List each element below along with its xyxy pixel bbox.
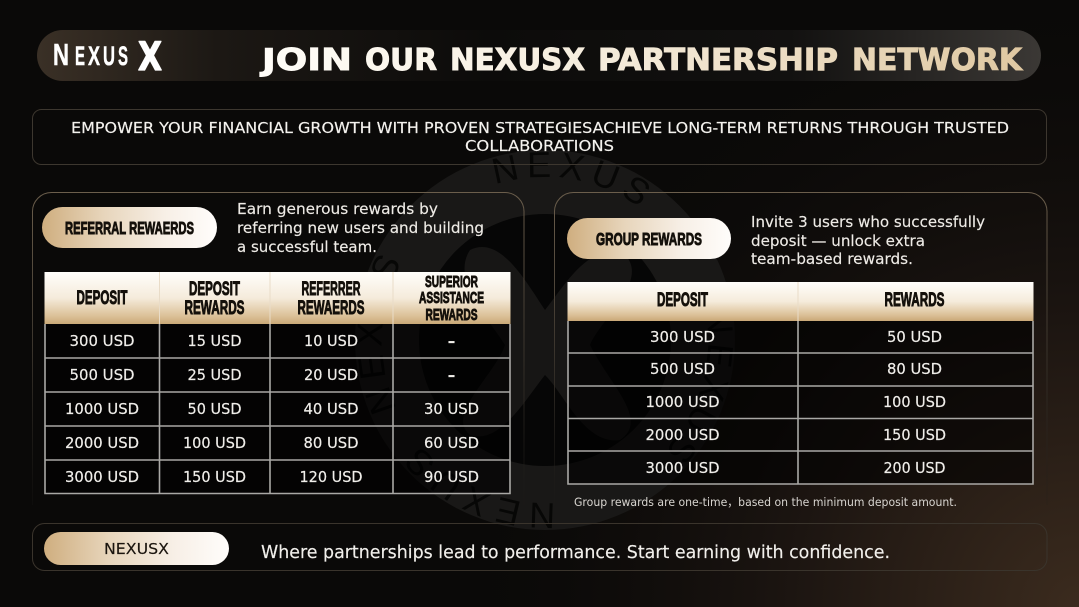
group description: deposit — unlock extra <box>751 232 925 250</box>
group description: team-based rewards. <box>751 250 913 268</box>
referral description: referring new users and building <box>237 219 484 237</box>
title: OUR <box>365 43 437 78</box>
table: referral rewards: REFERRER <box>302 279 361 300</box>
table: referral rewards: 10 USD <box>304 332 358 350</box>
table: referral rewards: DEPOSIT <box>189 279 240 300</box>
table: group rewards <box>568 282 1034 484</box>
title: NEXUSX <box>450 43 585 78</box>
logo: NexusX wordmark: X <box>88 41 100 71</box>
logo: NexusX wordmark: N <box>53 37 69 72</box>
table: referral rewards: 1000 USD <box>65 400 139 418</box>
logo: NexusX wordmark: E <box>75 41 85 71</box>
subheading box <box>32 110 1046 164</box>
referral description: a successful team. <box>237 238 377 256</box>
watermark: NexusX seal: NEXUS NEXUS NEXUS NEXUS <box>372 152 649 528</box>
tagline: Where partnerships lead to performance. Start earning with confidence. <box>261 542 890 563</box>
table: referral rewards <box>44 272 510 494</box>
table: referral rewards: REWARDS <box>184 298 244 319</box>
subheading box: EMPOWER YOUR FINANCIAL GROWTH WITH PROVEN STRATEGIESACHIEVE LONG-TERM RETURNS THROUGH TRUSTED <box>71 119 1009 137</box>
title <box>260 43 1024 78</box>
table: referral rewards: 90 USD <box>424 468 479 486</box>
table: group rewards: 80 USD <box>887 360 942 378</box>
table: referral rewards: 150 USD <box>183 468 246 486</box>
table: referral rewards: – <box>448 332 455 350</box>
table: group rewards: 200 USD <box>884 459 946 477</box>
table: group rewards: 2000 USD <box>646 426 720 444</box>
table: referral rewards: 300 USD <box>70 332 134 350</box>
badge: referral rewards <box>42 207 217 248</box>
table: group rewards: DEPOSIT <box>657 290 708 311</box>
subheading box: COLLABORATIONS <box>465 137 614 155</box>
table: referral rewards: 120 USD <box>300 468 362 486</box>
table: referral rewards: 2000 USD <box>65 434 139 452</box>
table: referral rewards: 15 USD <box>188 332 242 350</box>
panel: referral rewards <box>32 192 524 505</box>
logo: NexusX wordmark: S <box>118 41 128 71</box>
group description <box>751 213 985 268</box>
table: referral rewards: REWARDS <box>426 307 478 324</box>
table: referral rewards: 500 USD <box>70 366 134 384</box>
table: referral rewards: 40 USD <box>304 400 358 418</box>
badge: group rewards: GROUP REWARDS <box>596 229 702 249</box>
table: group rewards: 150 USD <box>883 426 946 444</box>
table: referral rewards: DEPOSIT <box>76 288 128 309</box>
table: referral rewards: 50 USD <box>188 400 242 418</box>
table: group rewards: REWARDS <box>884 290 944 311</box>
panel: group rewards <box>554 192 1047 509</box>
table: group rewards: 100 USD <box>883 393 946 411</box>
group description: Invite 3 users who successfully <box>751 213 985 231</box>
table: referral rewards: – <box>448 366 455 384</box>
badge: group rewards <box>567 218 731 259</box>
logo: NexusX wordmark: U <box>103 41 115 71</box>
footer bar <box>32 524 1047 570</box>
referral description: Earn generous rewards by <box>237 200 438 218</box>
table: referral rewards: 100 USD <box>183 434 246 452</box>
logo: NexusX wordmark: X <box>138 35 162 80</box>
title: PARTNERSHIP <box>598 43 838 78</box>
table: group rewards: 500 USD <box>650 360 715 378</box>
table: group rewards: 50 USD <box>887 328 942 346</box>
table: referral rewards: SUPERIOR <box>425 274 478 291</box>
badge: referral rewards: REFERRAL REWAERDS <box>65 218 194 238</box>
table: group rewards: 300 USD <box>650 328 715 346</box>
table: group rewards: 1000 USD <box>646 393 720 411</box>
table: referral rewards: 3000 USD <box>65 468 139 486</box>
logo: NexusX wordmark <box>53 35 162 80</box>
referral description <box>237 200 484 256</box>
title: NETWORK <box>852 43 1024 78</box>
badge: NexusX <box>44 532 229 565</box>
badge: NexusX: NEXUSX <box>104 540 169 558</box>
table: referral rewards: REWAERDS <box>298 298 364 319</box>
table: referral rewards: 80 USD <box>304 434 358 452</box>
header bar <box>37 30 1041 81</box>
table: group rewards: 3000 USD <box>646 459 720 477</box>
table: referral rewards: ASSISTANCE <box>419 290 484 307</box>
title: JOIN <box>260 43 352 78</box>
footnote: Group rewards are one-time，based on the minimum deposit amount. <box>574 495 957 509</box>
table: referral rewards: 30 USD <box>424 400 479 418</box>
table: referral rewards: 20 USD <box>304 366 358 384</box>
table: referral rewards: 60 USD <box>424 434 479 452</box>
table: referral rewards: 25 USD <box>188 366 242 384</box>
